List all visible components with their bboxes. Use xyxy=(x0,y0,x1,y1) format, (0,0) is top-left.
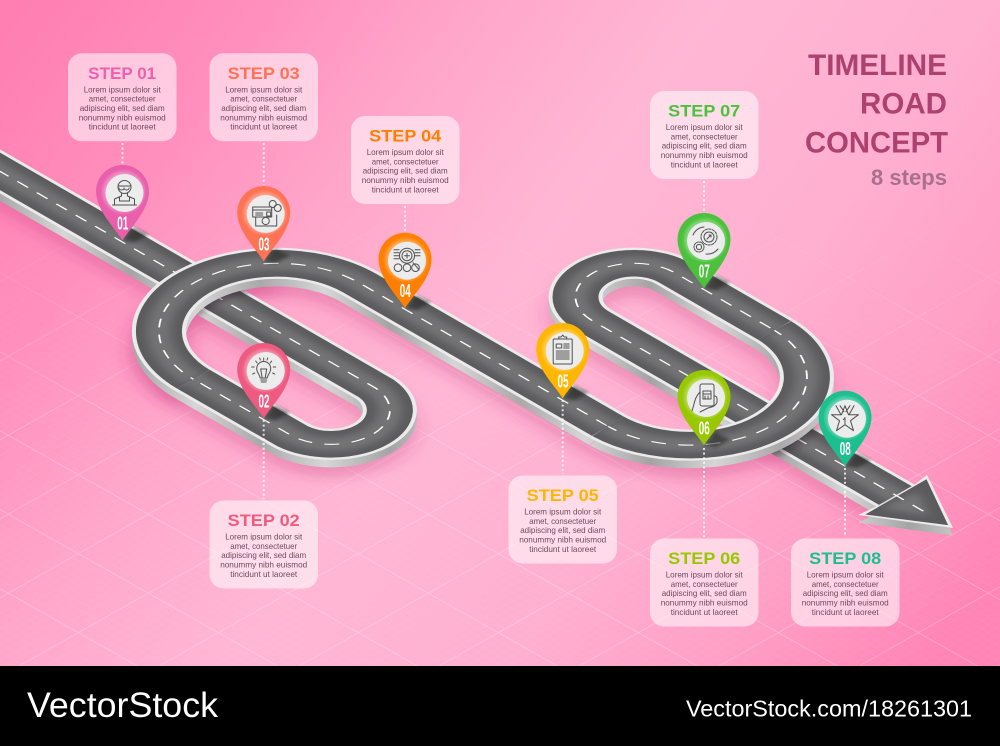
road ground shadow xyxy=(0,165,899,515)
panel: step 04: adipiscing elit, sed diam xyxy=(363,166,448,176)
overpass shadow on exit road xyxy=(772,426,822,458)
panel: step 08: Lorem ipsum dolor sit xyxy=(807,570,884,580)
panel: step 01: tincidunt ut laoreet xyxy=(89,122,156,132)
panel: step 07: adipiscing elit, sed diam xyxy=(662,141,747,151)
panel: step 03: amet, consectetuer xyxy=(230,94,297,104)
panel: step 07: Lorem ipsum dolor sit xyxy=(666,122,743,132)
pin 04 with analysis icon xyxy=(378,233,432,310)
panel: step 01: adipiscing elit, sed diam xyxy=(80,103,165,113)
panel: step 06: nonummy nibh euismod xyxy=(661,598,748,608)
panel: step 08: amet, consectetuer xyxy=(812,579,879,589)
panel: step 06: Lorem ipsum dolor sit xyxy=(666,570,743,580)
panel: step 03: nonummy nibh euismod xyxy=(220,112,308,122)
panel: step 05: STEP 05 xyxy=(527,486,599,505)
panel: step 06: tincidunt ut laoreet xyxy=(671,607,738,617)
watermark footer xyxy=(0,666,1000,746)
pin 04 with analysis icon: 04 xyxy=(400,281,411,301)
panel: step 05: amet, consectetuer xyxy=(529,516,596,526)
pin 06 with phone in hand icon: 06 xyxy=(699,418,710,438)
pin 07 with gears icon xyxy=(678,213,730,290)
pin 06 with phone in hand icon xyxy=(678,370,730,448)
panel: step 01: STEP 01 xyxy=(88,64,156,83)
pin 02 with light bulb icon xyxy=(237,343,290,420)
panel: step 02: adipiscing elit, sed diam xyxy=(221,550,306,560)
panel: step 01: Lorem ipsum dolor sit xyxy=(84,84,161,94)
pin 07 with gears icon: 07 xyxy=(699,261,710,281)
pin 03 with money icon xyxy=(237,186,290,264)
panel: step 03: Lorem ipsum dolor sit xyxy=(225,84,303,94)
panel: step 03: adipiscing elit, sed diam xyxy=(221,103,306,113)
road section: entry straight and first U-turn xyxy=(0,148,390,452)
pin 02 with light bulb icon: 02 xyxy=(259,391,270,411)
title xyxy=(805,49,948,190)
panel: step 03: STEP 03 xyxy=(228,64,300,83)
panel: step 07: amet, consectetuer xyxy=(671,131,738,141)
panel: step 04: amet, consectetuer xyxy=(372,156,439,166)
panel: step 06: adipiscing elit, sed diam xyxy=(662,588,747,598)
panel: step 08: nonummy nibh euismod xyxy=(802,598,889,608)
title: 8 steps xyxy=(871,165,947,190)
arrow head xyxy=(575,263,953,535)
panel: step 02: nonummy nibh euismod xyxy=(220,560,308,570)
panel: step 07 xyxy=(650,91,758,179)
panel: step 02: tincidunt ut laoreet xyxy=(230,569,298,579)
panel: step 06: amet, consectetuer xyxy=(671,579,738,589)
panel: step 06 xyxy=(650,538,758,626)
panel: step 08: STEP 08 xyxy=(809,549,881,568)
road section: large left loop and long diagonal xyxy=(159,263,608,434)
panel: step 01: nonummy nibh euismod xyxy=(79,112,166,122)
panel: step 03: tincidunt ut laoreet xyxy=(230,122,298,132)
panel: step 06: STEP 06 xyxy=(668,549,740,568)
pin 01 with person icon xyxy=(96,165,149,242)
watermark footer: VectorStock xyxy=(27,686,219,725)
panel: step 05: nonummy nibh euismod xyxy=(519,534,607,544)
pin 08 with star icon xyxy=(818,391,872,468)
overpass shadow on entry straight xyxy=(196,290,254,318)
panel: step 02: Lorem ipsum dolor sit xyxy=(225,532,303,542)
panel: step 04: Lorem ipsum dolor sit xyxy=(367,147,444,157)
panel: step 08: adipiscing elit, sed diam xyxy=(803,588,888,598)
panel: step 07: nonummy nibh euismod xyxy=(661,150,748,160)
panel: step 02: amet, consectetuer xyxy=(230,541,297,551)
road section: upper small U-turn and exit xyxy=(575,263,899,505)
panel: step 05: tincidunt ut laoreet xyxy=(529,544,597,554)
dotted connector lines xyxy=(122,143,845,537)
panel: step 02: STEP 02 xyxy=(228,511,300,530)
road xyxy=(0,148,953,535)
panel: step 05: Lorem ipsum dolor sit xyxy=(524,506,602,516)
panel: step 05: adipiscing elit, sed diam xyxy=(520,525,605,535)
pin 05 with clipboard icon xyxy=(536,323,589,400)
title: CONCEPT xyxy=(805,126,948,160)
panel: step 08 xyxy=(791,538,900,626)
panel: step 02 xyxy=(210,500,318,588)
pin 03 with money icon: 03 xyxy=(259,234,270,254)
panel: step 01: amet, consectetuer xyxy=(89,94,156,104)
panel: step 04 xyxy=(351,116,460,204)
panel: step 03 xyxy=(210,53,318,141)
road section: big right curve xyxy=(608,330,807,453)
panel: step 07: STEP 07 xyxy=(668,102,740,120)
watermark footer: VectorStock.com/18261301 xyxy=(686,696,972,722)
panel: step 04: tincidunt ut laoreet xyxy=(372,184,439,194)
panel: step 01 xyxy=(68,53,176,141)
panel: step 07: tincidunt ut laoreet xyxy=(671,159,738,169)
title: TIMELINE xyxy=(808,49,947,82)
pin 01 with person icon: 01 xyxy=(117,213,128,233)
pin 08 with star icon: 08 xyxy=(840,439,851,459)
panel: step 04: STEP 04 xyxy=(369,126,442,146)
panel: step 05 xyxy=(508,476,617,564)
title: ROAD xyxy=(860,88,947,120)
panel: step 08: tincidunt ut laoreet xyxy=(812,607,879,617)
panel: step 04: nonummy nibh euismod xyxy=(362,175,449,185)
pin 05 with clipboard icon: 05 xyxy=(558,371,569,391)
